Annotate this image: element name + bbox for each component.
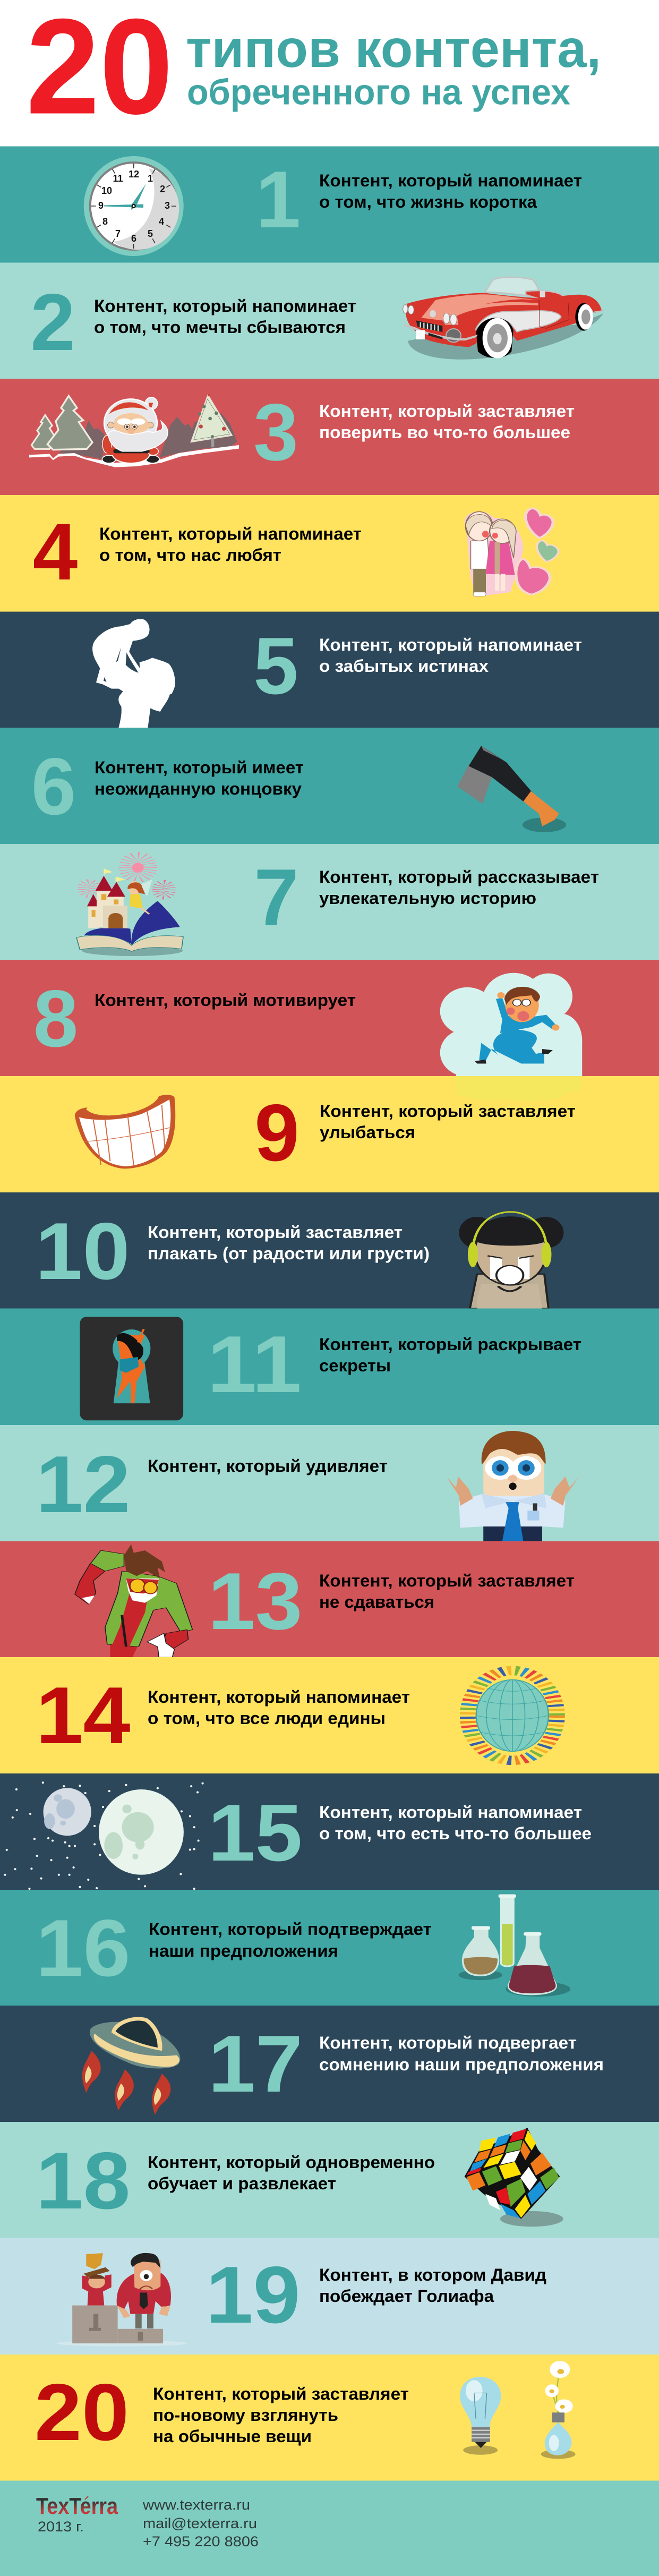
number 5: 5	[253, 621, 298, 711]
icon: podium with winner and loser	[57, 2253, 187, 2347]
icon: light bulb	[460, 2377, 501, 2455]
item text: Контент, который напоминает	[94, 296, 356, 315]
icon: clock: 6	[131, 233, 136, 244]
item text: Контент, который подтверждает	[149, 1920, 432, 1939]
item text	[319, 867, 599, 908]
item text: Контент, который напоминает	[148, 1687, 410, 1707]
icon: fairy-tale book	[76, 857, 183, 956]
item text: плакать (от радости или грусти)	[148, 1244, 430, 1263]
panel: item 1	[0, 147, 659, 262]
number 10: 10	[35, 1206, 130, 1296]
item text	[94, 296, 356, 337]
item text: о забытых истинах	[319, 656, 489, 676]
item text: поверить во что-то большее	[319, 423, 570, 442]
item text: Контент, который рассказывает	[319, 867, 599, 886]
item text: о том, что мечты сбываются	[94, 318, 346, 337]
icon: bulb vase with daisies	[541, 2361, 576, 2459]
number 18: 18	[36, 2136, 131, 2226]
item text	[148, 1223, 430, 1263]
panel: item 11	[0, 1309, 659, 1426]
title line 1: типов контента,	[186, 19, 601, 79]
panel: item 5	[0, 612, 659, 728]
number 3: 3	[253, 387, 298, 477]
panel: item 7	[0, 844, 659, 960]
icon: clock: 8	[102, 216, 108, 227]
number 16: 16	[36, 1903, 131, 1993]
number 4: 4	[33, 507, 78, 597]
number 17: 17	[208, 2019, 303, 2109]
panel: item 12	[0, 1425, 659, 1541]
logo: TexTerra: TexTerra	[36, 2493, 118, 2519]
item text	[95, 758, 304, 798]
item text	[319, 171, 582, 211]
panel: item 3	[0, 379, 659, 495]
icon: crying child with headphones	[459, 1212, 563, 1309]
item text: Контент, который мотивирует	[95, 991, 356, 1010]
item text: обучает и развлекает	[148, 2174, 336, 2193]
icon: Santa and trees	[29, 394, 239, 467]
contacts: mail@texterra.ru	[143, 2515, 257, 2531]
item text: неожиданную концовку	[95, 779, 302, 798]
number 6: 6	[31, 741, 76, 832]
item text: Контент, который раскрывает	[319, 1335, 581, 1354]
panel: item 8	[0, 960, 659, 1077]
item text	[319, 402, 575, 442]
item text	[319, 1803, 592, 1843]
item text: Контент, который удивляет	[148, 1456, 388, 1475]
panel: item 2	[0, 262, 659, 379]
item text: увлекательную историю	[319, 889, 536, 908]
icon: moons and stars	[5, 1782, 203, 1889]
panel: item 16	[0, 1890, 659, 2006]
panel: item 15	[0, 1773, 659, 1890]
title line 2: обреченного на успех	[187, 72, 570, 113]
number 2: 2	[30, 277, 75, 368]
icon: couple and hearts	[465, 508, 559, 597]
item text: Контент, который напоминает	[319, 171, 582, 190]
panel: item 4	[0, 495, 659, 612]
icon: clock: 9	[98, 200, 104, 211]
number 15: 15	[208, 1788, 303, 1878]
panel: item 18	[0, 2122, 659, 2238]
number 12: 12	[36, 1439, 131, 1530]
item text	[149, 1920, 432, 1960]
item text: о том, что все люди едины	[148, 1709, 386, 1728]
item text	[153, 2384, 409, 2446]
footer	[0, 2480, 659, 2576]
item text: Контент, который напоминает	[319, 635, 582, 654]
item text	[319, 635, 582, 676]
item text	[148, 2153, 435, 2193]
item text: Контент, который заставляет	[153, 2384, 409, 2403]
icon: axe	[457, 746, 566, 832]
item text: Контент, который заставляет	[148, 1223, 403, 1242]
item text	[148, 1687, 410, 1728]
number 14: 14	[36, 1670, 131, 1761]
icon: keyhole	[80, 1317, 183, 1420]
item text	[319, 1571, 575, 1611]
item text	[320, 1102, 576, 1142]
item text: улыбаться	[320, 1123, 415, 1142]
panel: item 17	[0, 2006, 659, 2122]
icon: clock	[84, 156, 184, 256]
item text: секреты	[319, 1356, 391, 1375]
number 8: 8	[33, 974, 78, 1064]
panel: item 13	[0, 1541, 659, 1658]
item text: на обычные вещи	[153, 2427, 312, 2446]
icon: clock: 3	[165, 200, 170, 211]
panel: item 6	[0, 728, 659, 844]
number 7: 7	[254, 852, 299, 943]
item text: о том, что жизнь коротка	[319, 192, 537, 211]
icon: running superhero	[75, 1545, 193, 1657]
cloud shadow	[456, 1076, 581, 1102]
title	[26, 0, 601, 142]
number 1: 1	[256, 155, 301, 245]
panel: item 9	[0, 1076, 659, 1192]
icon: Rubik's cube	[465, 2128, 563, 2227]
panel: item 20	[0, 2355, 659, 2481]
item text: наши предположения	[149, 1941, 338, 1960]
page background	[0, 0, 659, 147]
panel: item 10	[0, 1192, 659, 1309]
item text: Контент, который одновременно	[148, 2153, 435, 2172]
number 13: 13	[208, 1556, 303, 1647]
number 19: 19	[206, 2250, 301, 2340]
item text	[319, 2033, 604, 2074]
item text: Контент, который напоминает	[99, 524, 362, 543]
item text: сомнению наши предположения	[319, 2055, 604, 2074]
contacts: www.texterra.ru	[142, 2497, 250, 2513]
contacts: +7 495 220 8806	[143, 2534, 259, 2549]
item text	[319, 2265, 546, 2306]
icon: clock: 2	[160, 184, 165, 194]
icon: clock: 5	[148, 228, 153, 239]
panel: item 14	[0, 1657, 659, 1773]
year: 2013 г.	[38, 2519, 84, 2535]
icon: clock: 7	[115, 228, 121, 239]
icon: globe with ring of people	[468, 1670, 557, 1760]
item text: о том, что нас любят	[99, 545, 281, 565]
item text: Контент, который заставляет	[319, 402, 575, 421]
number 11: 11	[207, 1319, 302, 1410]
number 20: 20	[35, 2367, 129, 2458]
item text: не сдаваться	[319, 1592, 434, 1611]
icon: lab flasks	[459, 1895, 570, 1997]
item text: Контент, который напоминает	[319, 1803, 582, 1822]
item text: побеждает Голиафа	[319, 2287, 494, 2306]
icon: clock: 4	[159, 216, 164, 227]
icon: clock: 12	[129, 169, 139, 180]
item text	[99, 524, 362, 565]
icon: flying saucer	[82, 2017, 180, 2115]
icon: mother and child silhouette	[92, 619, 175, 728]
item text: Контент, который заставляет	[319, 1571, 575, 1590]
item text: по-новому взглянуть	[153, 2406, 338, 2425]
item text: о том, что есть что-то большее	[319, 1824, 592, 1843]
item text: Контент, который имеет	[95, 758, 304, 777]
icon: red car	[403, 277, 604, 360]
number 9: 9	[254, 1088, 299, 1178]
icon: clock: 10	[101, 185, 112, 196]
icon: smile	[75, 1095, 175, 1168]
item text: Контент, который заставляет	[320, 1102, 576, 1121]
panel: item 19	[0, 2238, 659, 2355]
icon: clock: 11	[113, 173, 123, 184]
icon: running boy on cloud	[440, 973, 582, 1077]
item text: Контент, который подвергает	[319, 2033, 577, 2052]
item text: Контент, в котором Давид	[319, 2265, 546, 2284]
item text	[319, 1335, 581, 1375]
contacts	[142, 2497, 259, 2549]
icon: surprised man	[447, 1431, 579, 1541]
icon: clock: 1	[148, 173, 153, 184]
